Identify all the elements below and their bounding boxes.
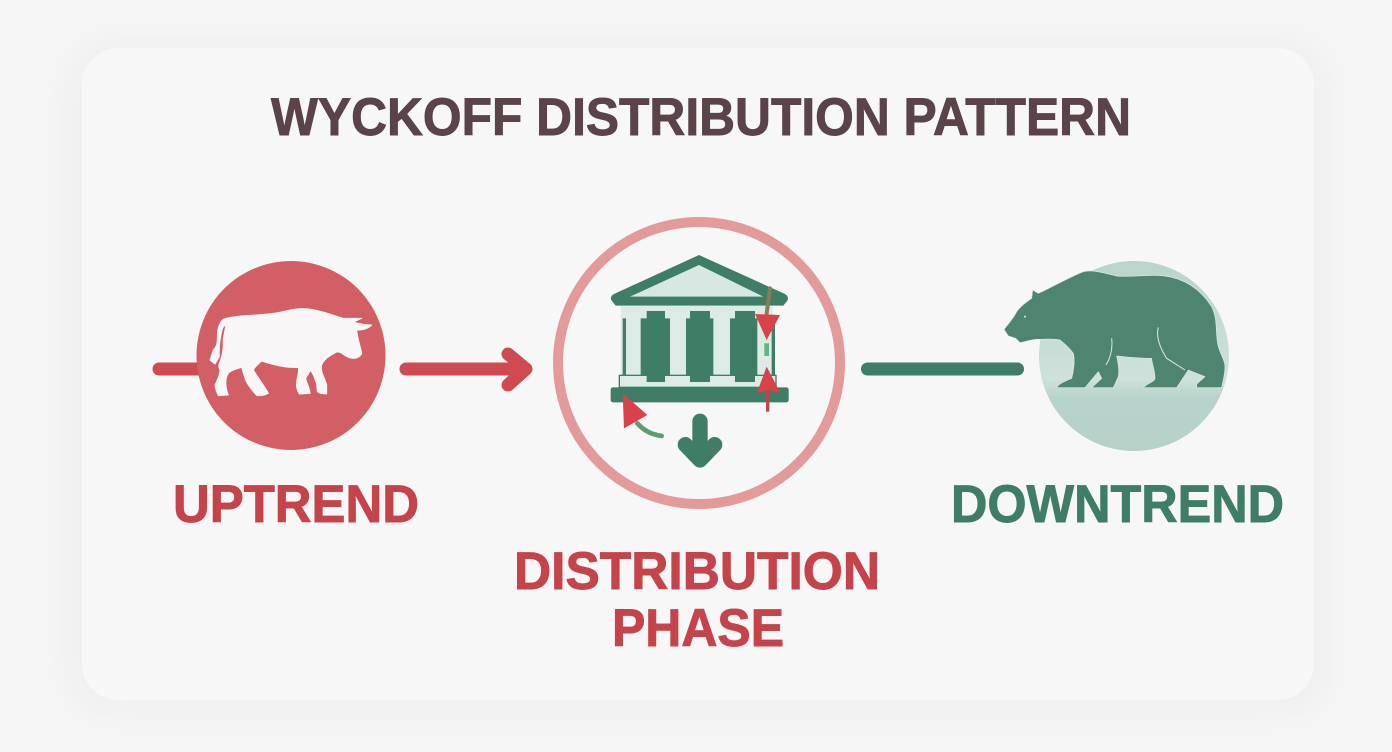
downtrend stage: circle and bear [1004, 261, 1229, 451]
uptrend stage: line, circle and bull [159, 261, 386, 450]
icon: bear silhouette [1004, 271, 1225, 388]
arrow: uptrend into distribution [406, 354, 526, 385]
circle: uptrend badge [196, 261, 386, 450]
arrow: down [685, 421, 715, 460]
arrow: curved red and green [623, 393, 662, 436]
panel: main card [82, 48, 1314, 700]
distribution stage: ring and temple [558, 222, 840, 504]
label: downtrend: DOWNTREND [951, 475, 1284, 534]
icon: bull silhouette [210, 309, 372, 396]
circle: downtrend badge [1039, 261, 1229, 451]
temple body [611, 255, 789, 402]
label: distribution phase: PHASE [612, 599, 784, 658]
line: incoming uptrend stub [159, 362, 205, 376]
icon: temple with arrows [611, 255, 789, 460]
title: WYCKOFF DISTRIBUTION PATTERN [271, 88, 1131, 147]
arrows on right column [755, 288, 781, 412]
label: distribution phase [514, 542, 880, 658]
label: uptrend: UPTREND [173, 475, 419, 534]
ring: distribution badge [558, 222, 840, 504]
label: distribution phase: DISTRIBUTION [514, 542, 880, 601]
line: distribution to downtrend [868, 362, 1018, 376]
